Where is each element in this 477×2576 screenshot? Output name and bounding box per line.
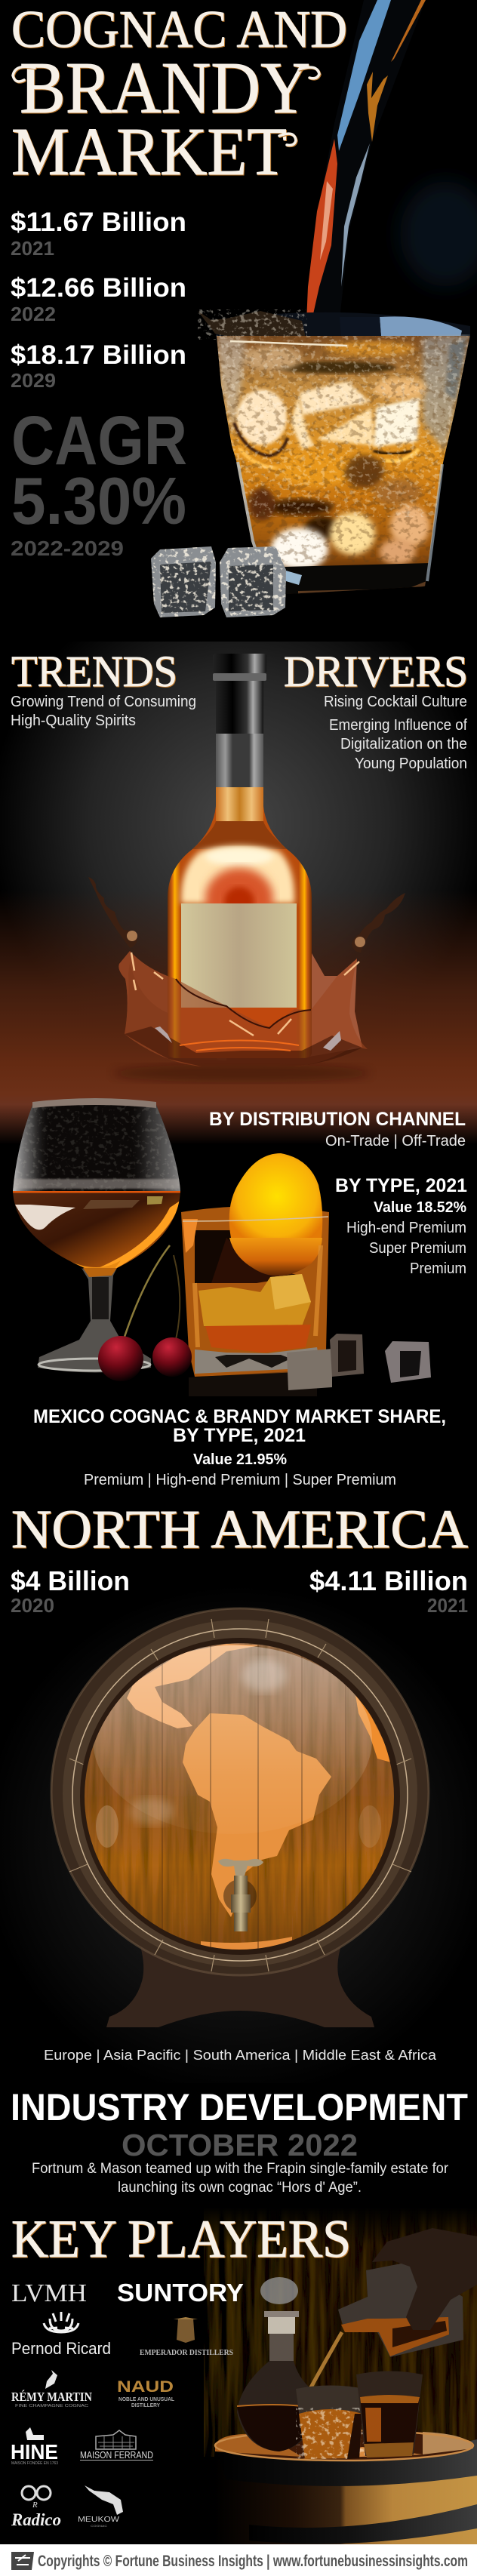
logo: Naud: NOBLE AND UNUSUAL [118,2397,175,2402]
logo: Remy Martin [11,2370,93,2408]
logo: Radico: R [32,2501,38,2510]
barrel [214,2430,477,2544]
CAGR figure: 2022-2029 [11,537,124,560]
decanter tilted [338,2262,463,2357]
right spray [352,893,405,953]
mexico market share: Premium | High-end Premium | Super Premium [84,1472,396,1488]
drivers text: Young Population [355,756,467,772]
logo: Emperador Distillers [140,2317,233,2357]
logo: Maison Ferrand: MAISON FERRAND [80,2449,153,2461]
ice cube [151,546,216,617]
planks [162,1642,346,1955]
stat: 2021 [309,1565,468,1617]
logo: Remy Martin: FINE CHAMPAGNE COGNAC [15,2404,89,2408]
stat: 2020: $4 Billion [11,1565,130,1596]
title [11,1,347,189]
logo: Naud: NAUD [117,2378,174,2396]
footer logo [11,2552,34,2570]
CAGR figure: CAGR [11,402,187,479]
description: Fortnum & Mason teamed up with the Frapin single-family estate for [32,2161,449,2177]
ice cubes in liquid [237,389,287,445]
top fade [0,1094,477,1144]
stem and foot [38,1268,151,1372]
tap [218,1859,263,1931]
barrel stand [106,1932,374,2027]
logo: Naud: DISTILLERY [131,2403,160,2408]
logo: Remy Martin: RÉMY MARTIN [11,2390,93,2404]
mexico market share: MEXICO COGNAC & BRANDY MARKET SHARE, [33,1406,446,1427]
mexico market share [33,1406,446,1488]
logo: Radico [11,2486,61,2529]
section: trends and drivers [0,642,477,1094]
trends text: Growing Trend of Consuming [11,694,196,710]
map: central america [127,1644,260,1728]
title flourishes [13,66,319,145]
trends text: High-Quality Spirits [11,712,136,729]
drivers text: Digitalization on the [340,736,467,752]
stat: 2021: $4.11 Billion [309,1565,468,1596]
section: segments [0,1094,477,1488]
logo: Suntory: SUNTORY [117,2279,244,2307]
logo: Radico: Radico [11,2510,61,2529]
mexico market share: Value 21.95% [193,1451,287,1468]
backdrop [0,642,477,1094]
map: antarctica [201,1937,292,1950]
ice in glass [198,1274,311,1326]
title: MARKET [11,115,287,189]
bottle [168,654,312,1059]
drivers text: Rising Cocktail Culture [324,694,467,710]
glass body [211,334,472,596]
wave [118,951,368,1066]
image: decanters on barrel [204,2208,477,2544]
stat: 2020: 2020 [11,1594,54,1617]
section: north america [0,1499,477,2083]
drivers text [324,694,467,772]
left glass side [217,336,245,438]
by type 2021: Value 18.52% [374,1199,466,1216]
stat: 2029 value: 2029 [11,369,56,392]
logo: Maison Ferrand [80,2430,153,2461]
section: key players [11,2208,477,2544]
middle of liquid [275,453,359,486]
pouring stream [302,2332,342,2411]
by type 2021: Super Premium [369,1240,466,1257]
logo: Meukow [78,2485,123,2528]
logo: Meukow: MEUKOW [78,2516,120,2524]
logo: Hine: HINE [11,2440,58,2464]
section: hero [11,0,477,617]
stat: 2029 value: $18.17 Billion [11,340,186,370]
title: BRANDY [20,48,310,129]
logo: Hine: MAISON FONDÉE EN 1763 [11,2461,58,2466]
logo: Hine [11,2427,58,2466]
mexico market share: BY TYPE, 2021 [173,1425,306,1446]
by type 2021: BY TYPE, 2021 [335,1175,467,1196]
crystal base [195,1347,321,1374]
dark arcs [234,423,288,456]
logo: Naud [117,2378,175,2408]
drivers heading: DRIVERS [284,647,468,696]
heading: KEY PLAYERS [11,2210,351,2269]
heading: NORTH AMERICA [11,1499,468,1559]
highlights [131,953,359,1036]
logo: LVMH: LVMH [11,2279,87,2307]
right glass side [423,334,470,453]
description: launching its own cognac “Hors d' Age”. [118,2180,362,2196]
title: COGNAC AND [11,1,347,59]
drivers text: Emerging Influence of [329,717,467,734]
footer [0,2544,477,2576]
stat: 2021 value [11,208,186,260]
stat: 2021 value: $11.67 Billion [11,208,186,237]
barrel [51,1608,429,1975]
by type 2021 [335,1175,467,1277]
lit ice at the bottom [271,528,328,570]
ice cubes [287,1334,431,1390]
stat: 2022 value [11,273,186,325]
stat: 2021 value: 2021 [11,237,54,260]
map: south america [183,1713,331,1917]
cherries [98,1245,192,1381]
CAGR figure: 5.30% [11,463,186,538]
description [32,2161,449,2196]
trends text [11,694,196,729]
splash behind bottle [118,951,362,1060]
logo: Pernod Ricard [11,2312,111,2358]
stat: 2022 value: 2022 [11,303,56,325]
glass rim and splash [198,309,470,340]
by type 2021: Premium [410,1260,466,1277]
logo: Pernod Ricard: Pernod Ricard [11,2339,111,2358]
by distribution channel: BY DISTRIBUTION CHANNEL [209,1109,466,1130]
other regions: Europe | Asia Pacific | South America | Middle East & Africa [44,2048,437,2063]
trends heading: TRENDS [11,647,177,696]
CAGR figure [11,402,187,560]
section: industry development [11,2086,468,2196]
hand [372,2228,477,2330]
stat: 2020 [11,1565,130,1617]
map: africa edge [355,1695,391,1762]
rim joints [69,1619,411,1971]
ice cube [220,546,286,617]
bottle cap [213,654,266,734]
pour stream [306,0,426,340]
glass base [285,563,429,594]
splash in front of bottle [88,877,405,1066]
bottle label [181,903,297,1008]
logo: Meukow: COGNAC [91,2524,107,2528]
stat: 2029 value [11,340,186,392]
by distribution channel [209,1109,466,1150]
backdrop glow [0,1555,477,2083]
image: snifter glass [8,1094,185,1372]
decanter [237,2277,314,2451]
glasses [296,2371,423,2459]
fine texture [211,336,472,562]
glass dome highlight [93,1645,372,1834]
by type 2021: High-end Premium [346,1220,466,1236]
image: old fashioned glass [181,1153,329,1396]
stat: 2022 value: $12.66 Billion [11,273,186,303]
date: OCTOBER 2022 [122,2128,358,2162]
stat: 2021: 2021 [427,1594,468,1617]
top band of liquid [275,362,396,374]
logo: Emperador Distillers: EMPERADOR DISTILLERS [140,2348,233,2357]
image: pouring glass of brandy [151,0,477,617]
left spray [88,877,137,948]
orange slice [229,1153,322,1276]
by distribution channel: On-Trade | Off-Trade [325,1133,466,1150]
